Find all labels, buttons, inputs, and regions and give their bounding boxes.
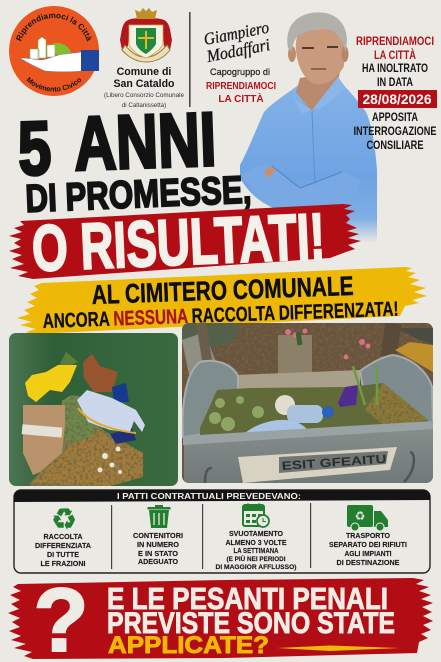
right callout xyxy=(354,34,437,152)
role text: RIPRENDIAMOCI xyxy=(206,81,276,92)
column: emptying xyxy=(216,529,296,571)
panel: contractual obligations xyxy=(14,490,430,573)
logo: Riprendiamoci la Città: Riprendiamoci la Città xyxy=(16,14,92,42)
panel header xyxy=(14,490,430,502)
column: transport: TRASPORTO xyxy=(346,531,390,540)
photo: green bin with mixed waste xyxy=(9,333,178,486)
municipality name xyxy=(104,66,185,109)
panel header: I PATTI CONTRATTUALI PREVEDEVANO: xyxy=(117,492,301,501)
column: collection xyxy=(35,532,91,568)
portrait xyxy=(240,12,377,243)
column: containers: ADEGUATO xyxy=(138,557,178,566)
logo: Riprendiamoci la Città: Movimento Civico xyxy=(26,77,82,92)
column: emptying: DI MAGGIOR AFFLUSSO) xyxy=(216,564,296,571)
municipality name: Comune di xyxy=(117,66,171,78)
column: emptying: ALMENO 3 VOLTE xyxy=(226,538,286,547)
divider xyxy=(189,12,191,107)
column: collection: DIFFERENZIATA xyxy=(35,541,91,550)
photo: metal dumpster in cemetery: ESIT GFEAITU xyxy=(281,452,387,473)
column: transport: AGLI IMPIANTI xyxy=(344,549,392,558)
crest: Comune di San Cataldo xyxy=(120,8,172,62)
photo: metal dumpster in cemetery xyxy=(182,322,434,483)
column: transport: DI DESTINAZIONE xyxy=(336,558,400,567)
municipality name: di Caltanissetta) xyxy=(122,102,166,109)
question text: PREVISTE SONO STATE xyxy=(107,607,395,640)
headline: 5 anni: 5 xyxy=(17,106,53,192)
question text xyxy=(107,581,395,659)
icon: truck xyxy=(347,505,388,531)
right callout: IN DATA xyxy=(377,75,413,89)
column: containers: E IN STATO xyxy=(138,549,178,558)
column: collection: LE FRAZIONI xyxy=(40,559,86,568)
column: containers xyxy=(133,531,183,566)
red brush banner: O RISULTATI! xyxy=(30,199,326,285)
column: containers: CONTENITORI xyxy=(133,531,183,540)
logo: Riprendiamoci la Città xyxy=(9,6,99,96)
municipality name: (Libero Consorzio Comunale xyxy=(104,92,185,99)
headline: 5 anni: ANNI xyxy=(73,97,218,187)
column: collection: RACCOLTA xyxy=(44,532,83,541)
headline: 5 anni xyxy=(17,97,218,192)
headline: di promesse: DI PROMESSE, xyxy=(25,169,252,221)
signature name xyxy=(202,18,272,66)
icon: truck: ♻ xyxy=(355,509,365,523)
column: emptying: LA SETTIMANA xyxy=(234,546,279,555)
signature name: Giampiero xyxy=(202,18,271,49)
question text: E LE PESANTI PENALI xyxy=(107,581,388,616)
yellow brush banner: AL CIMITERO COMUNALE xyxy=(91,271,354,310)
role text: LA CITTÀ xyxy=(218,92,264,105)
question text: APPLICATE? xyxy=(108,632,269,659)
bottom red brush banner xyxy=(8,571,433,662)
role text xyxy=(206,67,276,105)
right callout: LA CITTÀ xyxy=(374,47,416,62)
icon: calendar xyxy=(243,504,269,527)
right callout: APPOSITA xyxy=(372,110,418,124)
date box: 28/08/2026 xyxy=(362,91,432,107)
column: containers: IN NUMERO xyxy=(137,540,179,549)
icon: trash can xyxy=(148,505,170,528)
municipality name: San Cataldo xyxy=(114,78,175,90)
column: transport xyxy=(329,531,407,567)
column: emptying: SVUOTAMENTO xyxy=(229,529,283,538)
icon: recycling: ♻ xyxy=(51,502,77,536)
yellow brush banner xyxy=(17,267,427,334)
column: collection: DI TUTTE xyxy=(47,550,79,559)
column: transport: SEPARATO DEI RIFIUTI xyxy=(329,540,407,549)
column: emptying: (E PIÙ NEI PERIODI xyxy=(226,554,286,563)
right callout: CONSILIARE xyxy=(366,138,424,152)
signature name: Modaffari xyxy=(204,35,272,66)
role text: Capogruppo di xyxy=(210,67,270,77)
